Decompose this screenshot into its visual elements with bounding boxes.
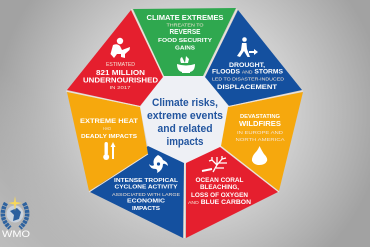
extreme heat text: EXTREME HEAT [80, 118, 138, 125]
ocean coral text: AND BLUE CARBON [188, 200, 251, 206]
climate extremes text [146, 15, 224, 52]
wildfires text [236, 114, 285, 143]
center title: extreme events [147, 110, 223, 122]
climate extremes text: CLIMATE EXTREMES [146, 15, 224, 22]
wildfires text: WILDFIRES [239, 121, 281, 128]
displacement text: LED TO DISASTER-INDUCED [212, 76, 285, 82]
tropical cyclone text: ASSOCIATED WITH LARGE [112, 192, 180, 197]
displacement text: DISPLACEMENT [217, 84, 278, 91]
icon: flame [252, 146, 267, 165]
extreme heat text: HAD [103, 126, 112, 131]
undernourished text: 821 MILLION [96, 70, 145, 77]
ocean coral text: LOSS OF OXYGEN [191, 193, 248, 199]
logo emblem [3, 196, 27, 228]
wildfires text: DEVASTATING [240, 114, 280, 120]
wildfires text: IN EUROPE AND [237, 130, 284, 136]
displacement text: FLOODS AND STORMS [212, 70, 283, 76]
tropical cyclone text: IMPACTS [132, 206, 160, 212]
tropical cyclone text [112, 178, 180, 212]
ocean coral text: BLEACHING, [200, 185, 239, 191]
wildfires text: NORTH AMERICA [236, 137, 285, 143]
extreme heat text: DEADLY IMPACTS [81, 134, 137, 140]
ocean coral text [188, 178, 251, 206]
center title: Climate risks, [152, 97, 218, 109]
tropical cyclone text: CYCLONE ACTIVITY [114, 184, 178, 190]
center title: and related [158, 123, 212, 135]
climate extremes text: FOOD SECURITY [158, 38, 212, 44]
undernourished text: IN 2017 [110, 85, 131, 90]
panel: tropical cyclone [90, 146, 184, 238]
center title: impacts [166, 136, 204, 148]
undernourished text: UNDERNOURISHED [83, 78, 158, 84]
center panel [140, 76, 229, 164]
panel: wildfires [221, 92, 303, 191]
tropical cyclone text: ECONOMIC [127, 198, 166, 204]
displacement text: DROUGHT, [229, 63, 265, 69]
tropical cyclone text: INTENSE TROPICAL [114, 178, 179, 184]
icon: coral [202, 156, 227, 172]
panel: extreme heat [67, 92, 148, 191]
center title [147, 97, 223, 148]
ocean coral text: OCEAN CORAL [196, 178, 244, 184]
panel: ocean coral [186, 147, 278, 238]
icon: mortar bowl [177, 56, 195, 73]
icon: thermometer and arrow [103, 142, 116, 160]
panel: climate extremes [133, 8, 236, 76]
extreme heat text [80, 118, 138, 140]
climate extremes text: GAINS [175, 46, 195, 52]
undernourished text: ESTIMATED [106, 62, 135, 68]
separator lines [66, 9, 303, 238]
icon: seated person [110, 38, 130, 58]
logo text: WMO [2, 229, 30, 240]
panel: displacement [205, 10, 302, 106]
displacement text [212, 63, 285, 91]
undernourished text [83, 62, 158, 90]
logo: WMO [2, 196, 30, 240]
icon: walking person with arrow [237, 37, 258, 57]
icon: cyclone [149, 155, 168, 173]
climate extremes text: REVERSE [170, 29, 201, 36]
panel: undernourished [67, 10, 163, 106]
climate extremes text: THREATEN TO [166, 22, 204, 28]
